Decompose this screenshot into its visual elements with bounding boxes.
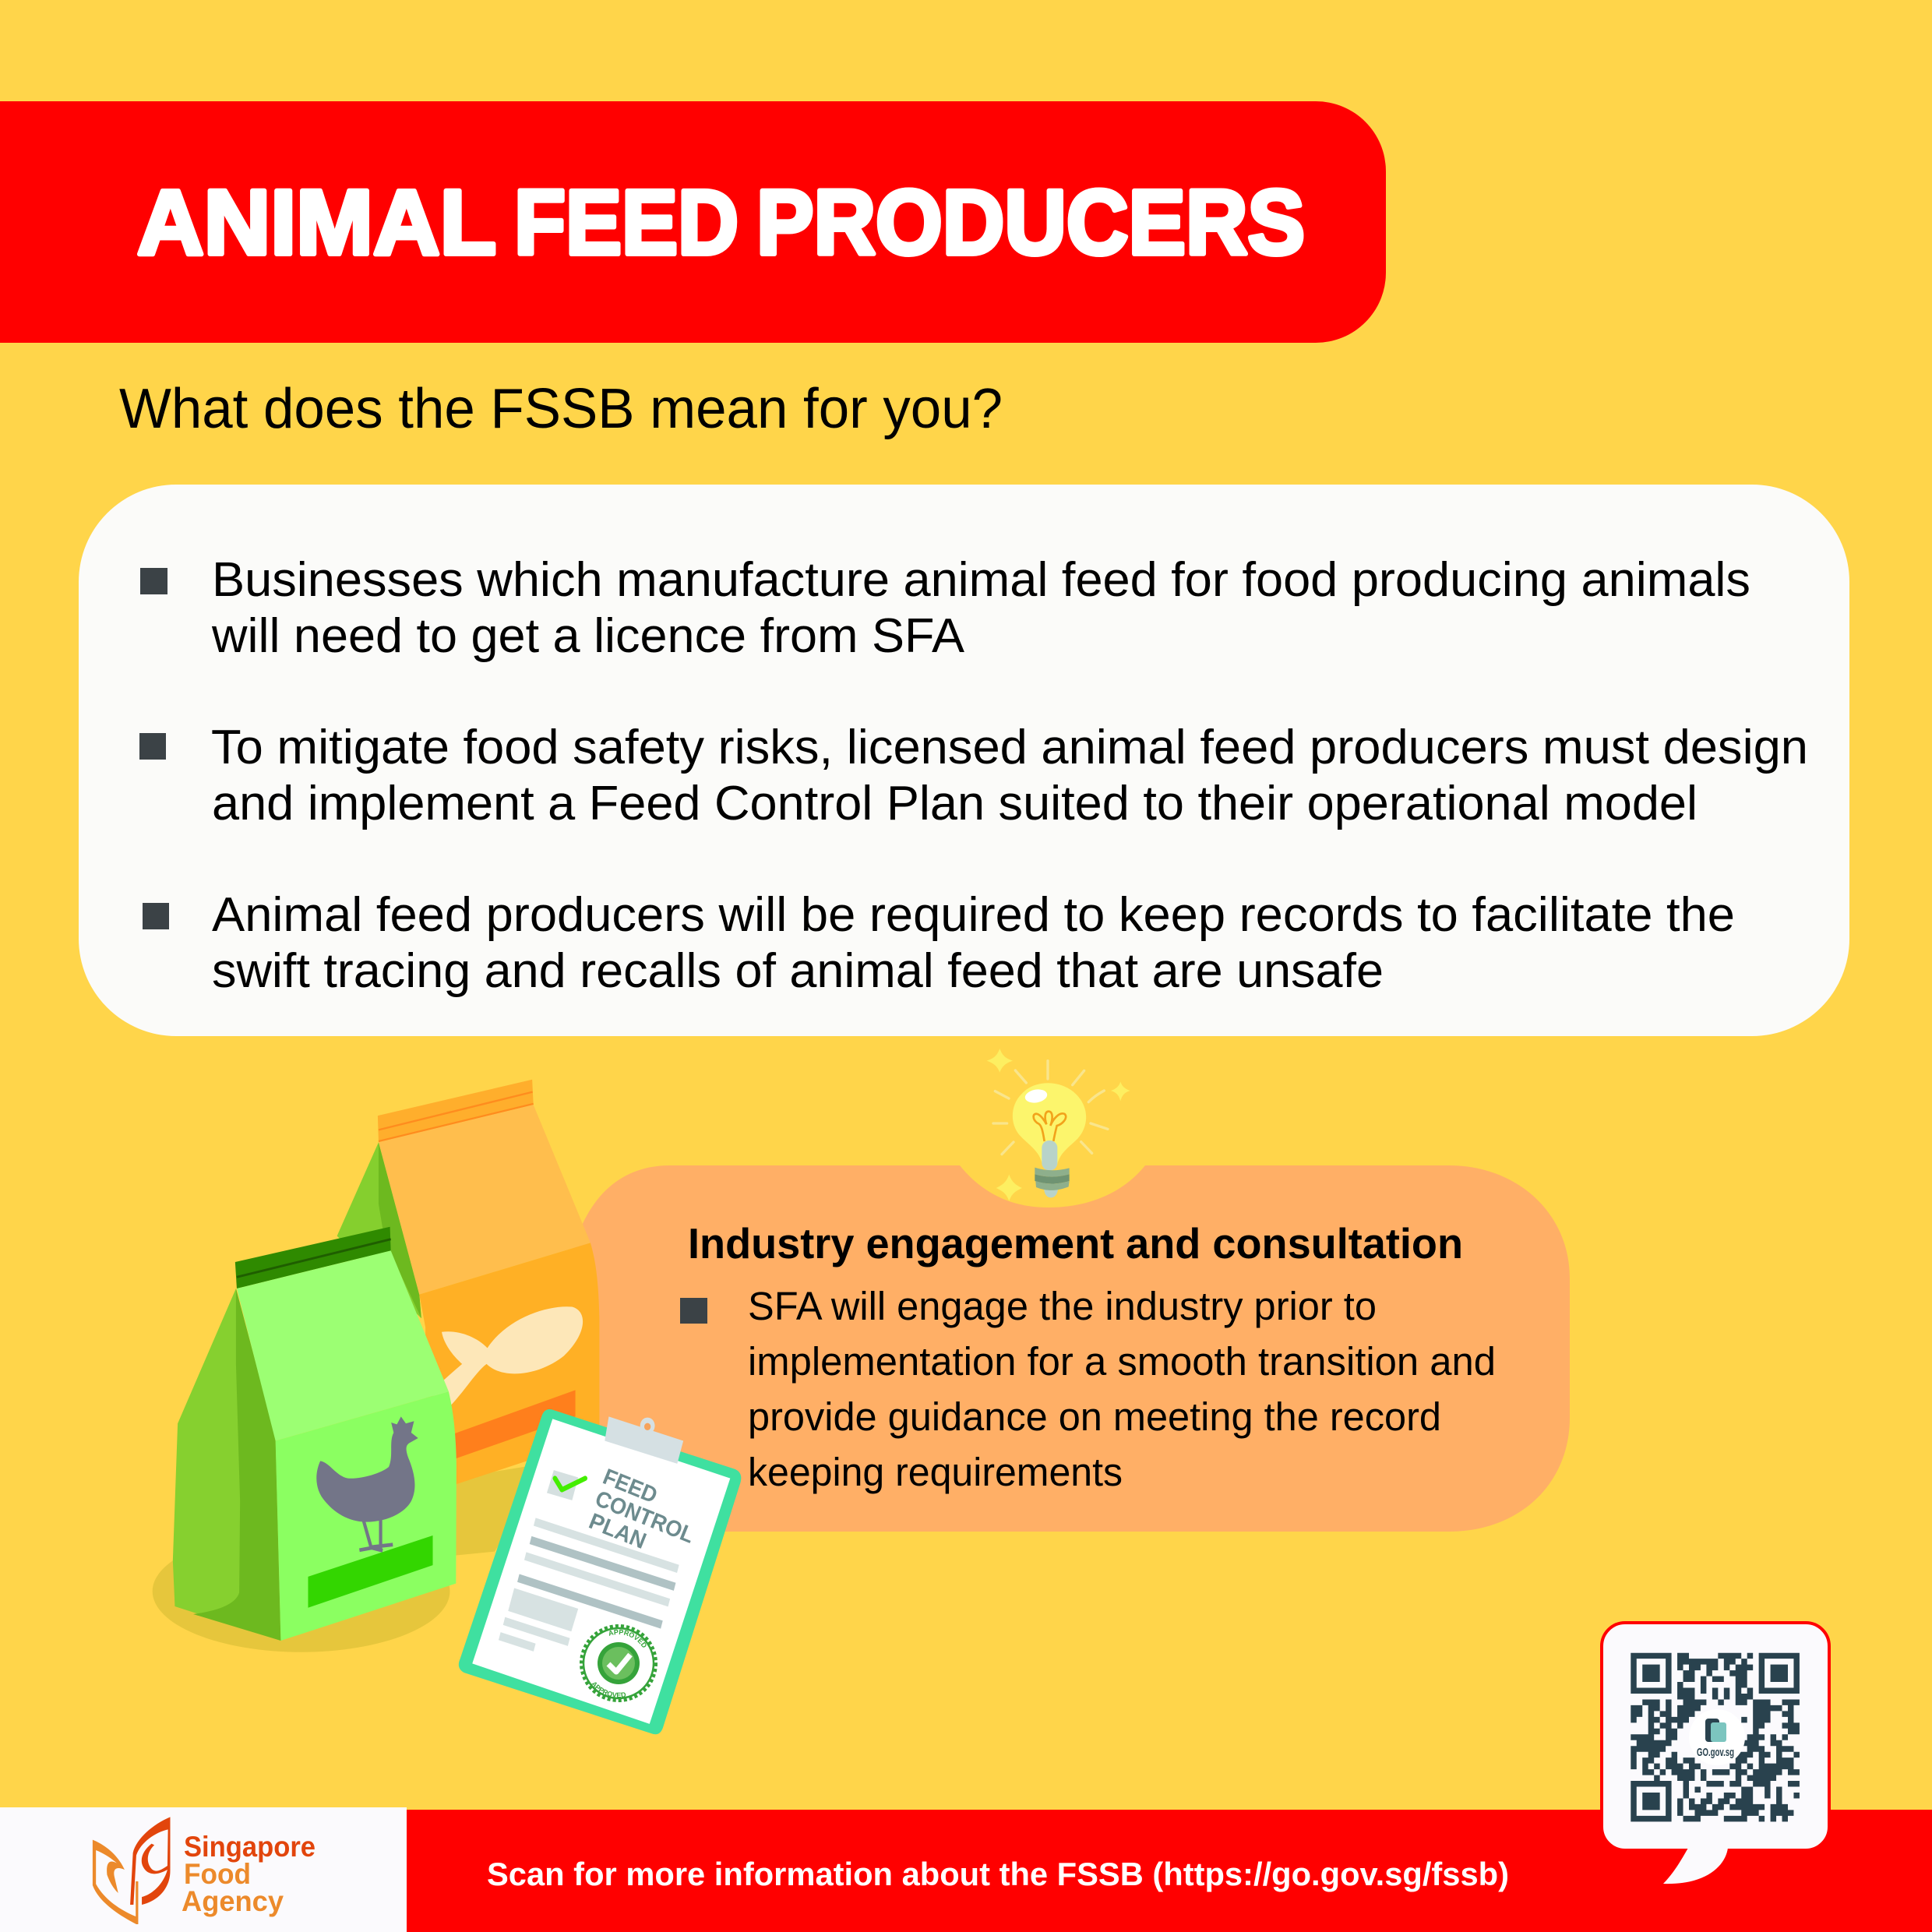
bullet 2: To mitigate food safety risks, licensed animal feed producers must design	[211, 721, 1808, 774]
orange fish feed bag	[337, 1080, 599, 1494]
logo wordmark: Singapore	[184, 1831, 316, 1863]
ground shadow	[153, 1462, 552, 1652]
icon: approved stamp: APPROVED	[591, 1682, 626, 1698]
clipboard title	[585, 1465, 698, 1554]
bullet 3	[143, 888, 1735, 998]
body text: SFA will engage the industry prior to	[748, 1284, 1377, 1328]
icon: approved stamp: APPROVED	[609, 1630, 647, 1648]
icon: light bulb	[987, 1049, 1130, 1201]
body text: provide guidance on meeting the record	[748, 1394, 1441, 1439]
clipboard title: PLAN	[585, 1509, 650, 1554]
title banner	[0, 101, 1386, 343]
panel: key requirements	[79, 485, 1849, 1036]
bullet 1	[140, 553, 1750, 663]
bullet 1: will need to get a licence from SFA	[211, 609, 965, 663]
body text: keeping requirements	[748, 1450, 1123, 1494]
bullet 2: and implement a Feed Control Plan suited to their operational model	[212, 777, 1698, 830]
panel: industry engagement and consultation	[561, 1165, 1570, 1532]
footer bar	[407, 1810, 1932, 1932]
icon: chicken	[316, 1416, 418, 1550]
bullet 3: Animal feed producers will be required to keep records to facilitate the	[212, 888, 1735, 942]
clipboard title: FEED	[599, 1465, 661, 1508]
QR speech bubble	[1602, 1623, 1829, 1884]
bullet	[680, 1298, 707, 1324]
QR centre logo	[1689, 1709, 1745, 1765]
icon: leaf logo	[93, 1817, 170, 1924]
subtitle: What does the FSSB mean for you?	[119, 378, 1003, 440]
clipboard	[459, 1409, 741, 1734]
bullet 1: Businesses which manufacture animal feed for food producing animals	[212, 553, 1750, 607]
clipboard title: CONTROL	[591, 1486, 698, 1549]
QR code	[1631, 1655, 1800, 1819]
logo wordmark: Food	[184, 1858, 251, 1890]
title: ANIMAL	[137, 171, 496, 274]
icon: approved stamp	[580, 1624, 658, 1702]
logo wordmark	[182, 1831, 316, 1917]
QR centre logo: GO.gov.sg	[1697, 1746, 1734, 1759]
body text: implementation for a smooth transition and	[748, 1339, 1496, 1384]
logo panel: Singapore Food Agency	[0, 1807, 407, 1932]
heading: Industry engagement and consultation	[688, 1219, 1463, 1267]
logo wordmark: Agency	[182, 1885, 284, 1917]
bullet 3: swift tracing and recalls of animal feed that are unsafe	[212, 944, 1384, 998]
title: FEED	[514, 171, 739, 274]
title	[137, 171, 1305, 274]
illustration: animal feed bags	[153, 1080, 741, 1734]
title: PRODUCERS	[756, 171, 1305, 274]
bullet 2	[139, 721, 1808, 830]
green chicken feed bag	[173, 1227, 457, 1641]
footer text: Scan for more information about the FSSB (https://go.gov.sg/fssb)	[487, 1856, 1509, 1892]
body text	[748, 1284, 1496, 1494]
